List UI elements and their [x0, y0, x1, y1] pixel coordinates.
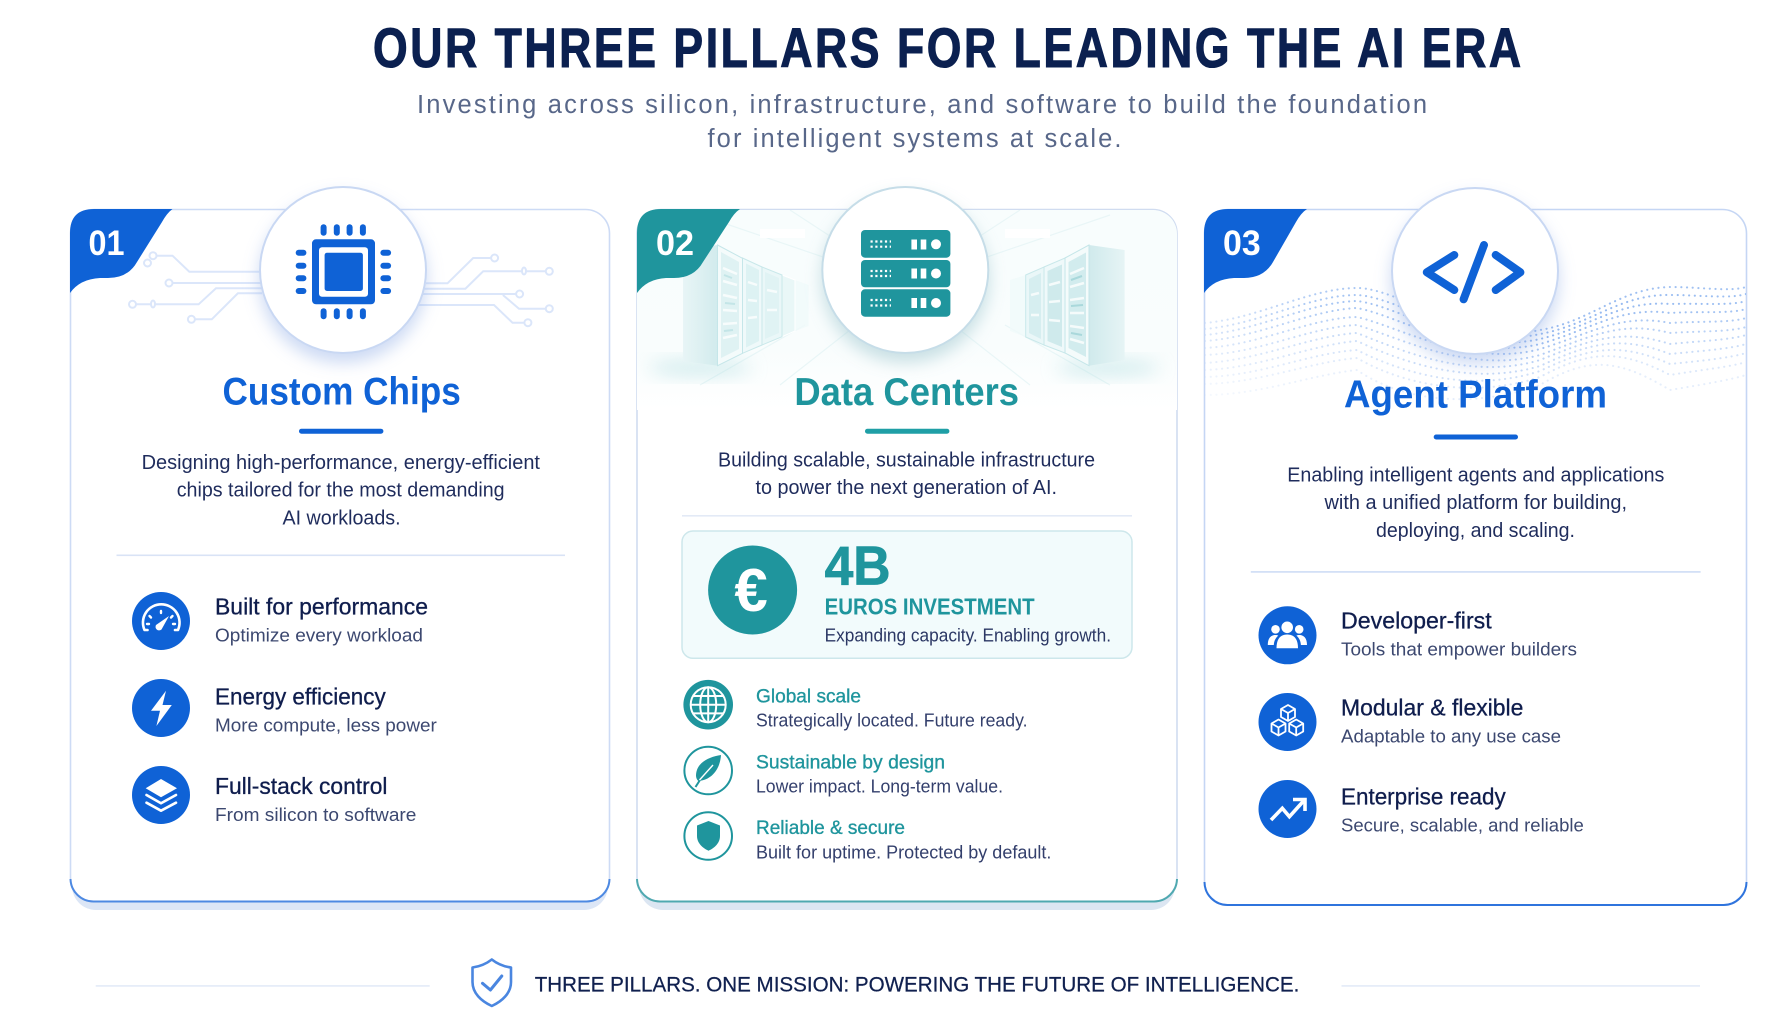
- panel: custom chips: [70, 187, 610, 910]
- description: with a unified platform for building,: [1324, 492, 1627, 514]
- description: deploying, and scaling.: [1376, 520, 1575, 542]
- feature: built for performance: Optimize every workload: [215, 625, 423, 646]
- description: [1287, 464, 1664, 542]
- feature: full-stack control: [132, 766, 416, 825]
- feature: reliable and secure: Reliable & secure: [756, 817, 905, 839]
- icon: code: [1392, 188, 1558, 354]
- heading: agent platform: Agent Platform: [1344, 374, 1607, 417]
- mission statement: THREE PILLARS. ONE MISSION: POWERING THE FUTURE OF INTELLIGENCE.: [535, 974, 1299, 997]
- number badge 02: [637, 209, 740, 293]
- feature: developer-first: Developer-first: [1341, 607, 1492, 633]
- dotted wave: [1205, 287, 1746, 399]
- icon: chip: [260, 187, 426, 353]
- feature: modular and flexible: [1258, 693, 1561, 751]
- description: [142, 452, 540, 529]
- description: Designing high-performance, energy-efficient: [142, 452, 540, 474]
- feature: enterprise ready: [1258, 780, 1584, 838]
- subtitle: [417, 91, 1427, 153]
- description: Enabling intelligent agents and applications: [1287, 464, 1664, 486]
- feature: sustainable by design: Lower impact. Long-term value.: [756, 776, 1003, 796]
- callout: investment: EUROS INVESTMENT: [825, 593, 1035, 619]
- icon: server: [822, 187, 988, 353]
- feature: global scale: [683, 680, 1028, 731]
- heading: data centers: Data Centers: [794, 371, 1019, 414]
- feature: reliable and secure: [684, 812, 1051, 862]
- number badge 03: [1204, 209, 1307, 293]
- footer: [96, 960, 1700, 1006]
- description: [718, 449, 1095, 499]
- number badge 01: 01: [88, 224, 124, 263]
- description: chips tailored for the most demanding: [177, 480, 505, 502]
- description: to power the next generation of AI.: [756, 477, 1057, 499]
- data hall illustration: [637, 210, 1177, 410]
- feature: developer-first: [1258, 606, 1577, 664]
- callout: investment: 4B: [825, 534, 891, 596]
- callout: investment: Expanding capacity. Enabling growth.: [825, 626, 1111, 646]
- number badge 01: [70, 209, 172, 293]
- feature: global scale: Global scale: [756, 685, 861, 707]
- number badge 02: 02: [656, 224, 694, 263]
- callout: investment: €: [734, 557, 768, 624]
- feature: built for performance: [132, 592, 428, 650]
- subtitle: for intelligent systems at scale.: [708, 125, 1122, 153]
- left racks: [683, 245, 809, 366]
- feature: energy efficiency: [132, 679, 437, 737]
- feature: full-stack control: From silicon to software: [215, 804, 416, 825]
- description: AI workloads.: [282, 507, 401, 529]
- feature: enterprise ready: Enterprise ready: [1341, 783, 1506, 809]
- feature: reliable and secure: Built for uptime. Protected by default.: [756, 842, 1051, 862]
- number badge 03: 03: [1223, 224, 1261, 263]
- circuit traces: [129, 252, 553, 326]
- feature: energy efficiency: More compute, less power: [215, 715, 437, 736]
- feature: energy efficiency: Energy efficiency: [215, 683, 386, 709]
- feature: enterprise ready: Secure, scalable, and reliable: [1341, 815, 1584, 836]
- feature: sustainable by design: Sustainable by design: [756, 751, 945, 773]
- feature: global scale: Strategically located. Future ready.: [756, 711, 1028, 731]
- panel: data centers: [637, 187, 1177, 910]
- feature: full-stack control: Full-stack control: [215, 773, 388, 799]
- icon: shield check: [472, 960, 511, 1006]
- subtitle: Investing across silicon, infrastructure, and software to build the foundation: [417, 91, 1427, 119]
- description: Building scalable, sustainable infrastructure: [718, 449, 1095, 471]
- right racks: [1025, 244, 1124, 366]
- panel: agent platform: [1204, 188, 1746, 905]
- feature: sustainable by design: [684, 747, 1003, 796]
- feature: modular and flexible: Adaptable to any use case: [1341, 726, 1561, 747]
- feature: modular and flexible: Modular & flexible: [1341, 694, 1523, 720]
- heading: custom chips: Custom Chips: [222, 370, 461, 413]
- feature: developer-first: Tools that empower builders: [1341, 639, 1577, 660]
- feature: built for performance: Built for performance: [215, 593, 428, 619]
- title: OUR THREE PILLARS FOR LEADING THE AI ERA: [373, 16, 1521, 79]
- callout: investment: [682, 531, 1132, 658]
